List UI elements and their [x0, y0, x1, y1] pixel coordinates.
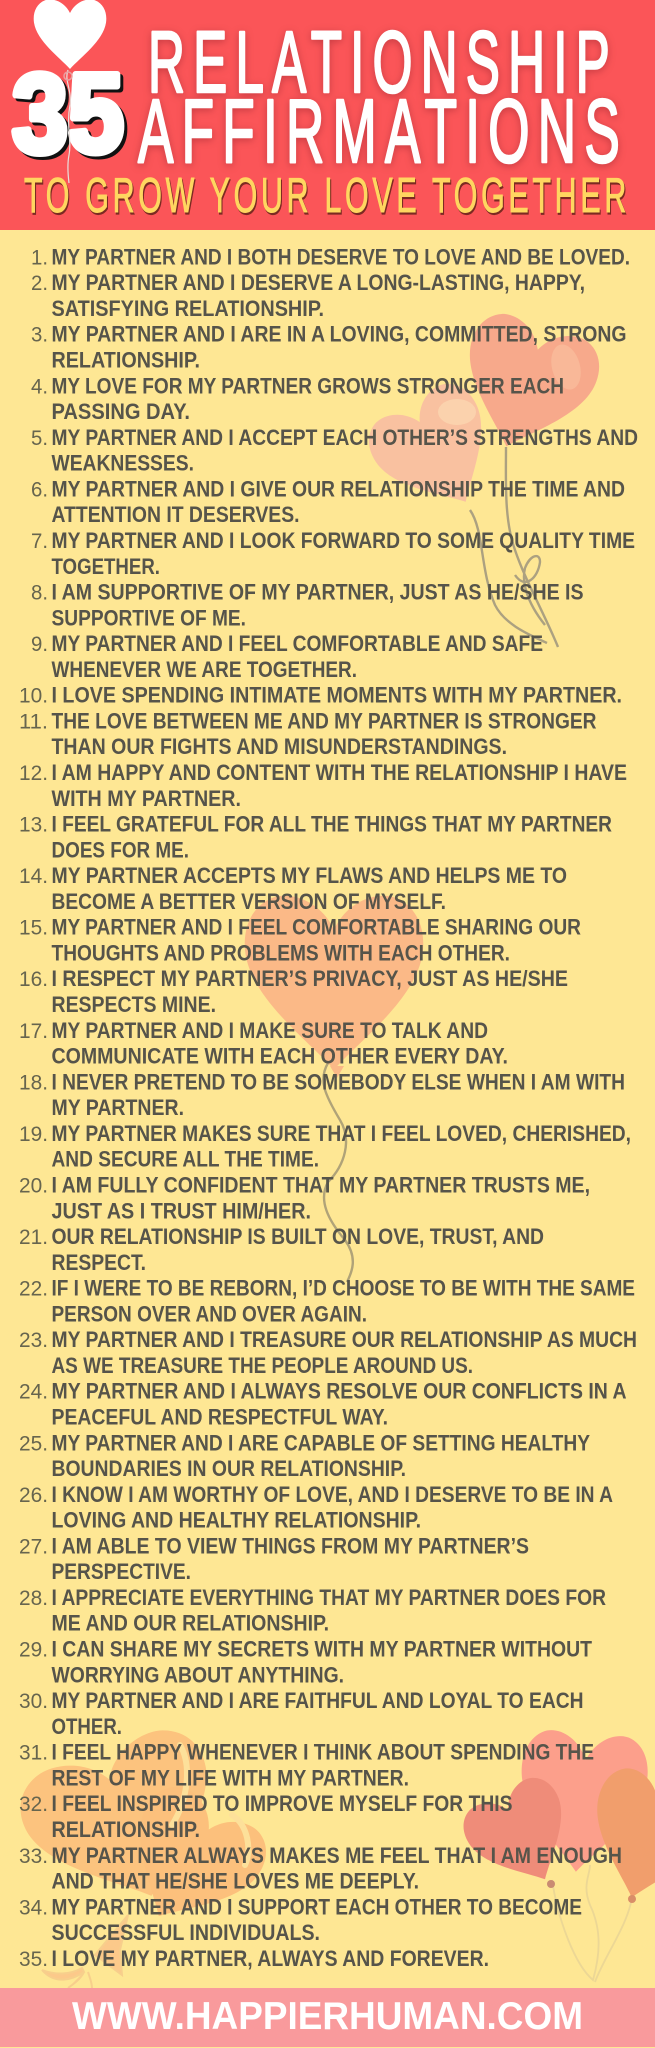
affirmation 32: I FEEL INSPIRED TO IMPROVE MYSELF FOR THIS — [52, 1791, 512, 1816]
affirmation 11: THAN OUR FIGHTS AND MISUNDERSTANDINGS. — [52, 734, 507, 759]
affirmation 14: 14. — [19, 864, 48, 888]
affirmation 21: 21. — [19, 1225, 48, 1249]
affirmation 14: MY PARTNER ACCEPTS MY FLAWS AND HELPS ME TO — [52, 863, 567, 888]
affirmation 28 — [19, 1585, 606, 1636]
affirmation 5: 5. — [31, 426, 48, 450]
affirmation 18: MY PARTNER. — [52, 1095, 184, 1120]
affirmation 15 — [19, 915, 581, 966]
affirmation 16: I RESPECT MY PARTNER’S PRIVACY, JUST AS HE/SHE — [52, 966, 568, 991]
affirmation 3: 3. — [31, 323, 48, 347]
affirmation 5 — [31, 425, 638, 476]
affirmation 19: 19. — [19, 1122, 48, 1146]
affirmation 13 — [19, 812, 612, 862]
affirmation 11: 11. — [19, 709, 48, 733]
affirmation 11 — [19, 708, 596, 759]
affirmation 17: MY PARTNER AND I MAKE SURE TO TALK AND — [52, 1018, 488, 1043]
affirmation 21: OUR RELATIONSHIP IS BUILT ON LOVE, TRUST, AND — [52, 1224, 544, 1249]
affirmation 13: DOES FOR ME. — [52, 837, 189, 862]
affirmation 15: THOUGHTS AND PROBLEMS WITH EACH OTHER. — [52, 940, 510, 966]
footer banner — [0, 1988, 655, 2047]
affirmation 2: 2. — [31, 271, 48, 295]
affirmation 31: REST OF MY LIFE WITH MY PARTNER. — [52, 1765, 409, 1790]
affirmation 13: 13. — [19, 813, 48, 837]
affirmation 7 — [31, 528, 635, 579]
affirmation 20: I AM FULLY CONFIDENT THAT MY PARTNER TRUSTS ME, — [52, 1172, 590, 1198]
affirmation 8 — [31, 580, 584, 630]
affirmation 9: WHENEVER WE ARE TOGETHER. — [52, 657, 357, 682]
affirmation 12: 12. — [19, 761, 48, 785]
affirmation 21: RESPECT. — [52, 1250, 146, 1275]
affirmation 29: WORRYING ABOUT ANYTHING. — [52, 1662, 344, 1687]
balloons: bottom left orange pair — [9, 1718, 278, 1988]
affirmation 6: 6. — [31, 477, 48, 501]
affirmation 8: SUPPORTIVE OF ME. — [52, 605, 246, 630]
affirmation 14 — [19, 863, 567, 914]
affirmation 30: 30. — [19, 1689, 48, 1713]
affirmation 7: TOGETHER. — [52, 554, 160, 579]
footer url: WWW.HAPPIERHUMAN.COM — [72, 1995, 583, 2038]
affirmation 31 — [19, 1740, 594, 1790]
affirmation 15: 15. — [19, 916, 48, 940]
affirmation 25 — [19, 1430, 590, 1481]
icon: white heart balloon — [34, 0, 106, 69]
affirmation 16: 16. — [19, 967, 48, 991]
affirmation 34: 34. — [19, 1895, 48, 1919]
affirmation 29 — [19, 1636, 592, 1687]
affirmation 20: JUST AS I TRUST HIM/HER. — [52, 1198, 311, 1223]
affirmation 9: 9. — [31, 632, 48, 656]
balloons: top right pair — [358, 306, 608, 647]
affirmation 21 — [19, 1224, 544, 1275]
affirmation 7: 7. — [31, 529, 48, 553]
title — [138, 14, 628, 182]
affirmation 23: AS WE TREASURE THE PEOPLE AROUND US. — [52, 1353, 473, 1378]
affirmation 2 — [31, 270, 585, 321]
affirmation 35: 35. — [19, 1947, 48, 1971]
affirmation 27: PERSPECTIVE. — [52, 1559, 191, 1584]
affirmation 4: 4. — [31, 374, 48, 398]
affirmation 20: 20. — [19, 1174, 48, 1198]
affirmation 33: 33. — [19, 1844, 48, 1868]
affirmation 16: RESPECTS MINE. — [52, 992, 216, 1017]
affirmations list — [19, 244, 638, 1971]
affirmation 9: MY PARTNER AND I FEEL COMFORTABLE AND SAFE — [52, 631, 543, 656]
affirmation 18 — [19, 1069, 625, 1120]
affirmation 31: 31. — [19, 1741, 48, 1765]
affirmation 17 — [19, 1018, 508, 1069]
affirmation 12 — [19, 760, 627, 811]
affirmation 14: BECOME A BETTER VERSION OF MYSELF. — [52, 889, 446, 914]
affirmation 20 — [19, 1172, 590, 1223]
affirmation 2: MY PARTNER AND I DESERVE A LONG-LASTING, HAPPY, — [52, 270, 585, 295]
affirmation 23 — [19, 1327, 637, 1378]
affirmation 16 — [19, 966, 568, 1017]
affirmation 12: WITH MY PARTNER. — [52, 786, 241, 811]
affirmation 27: I AM ABLE TO VIEW THINGS FROM MY PARTNER’S — [52, 1533, 529, 1558]
affirmation 27: 27. — [19, 1534, 48, 1558]
affirmation 25: 25. — [19, 1431, 48, 1455]
affirmation 8: 8. — [31, 580, 48, 604]
affirmation 1: 1. — [31, 245, 48, 269]
affirmation 3 — [31, 322, 626, 372]
affirmation 24 — [19, 1379, 626, 1430]
affirmation 28: 28. — [19, 1586, 48, 1610]
affirmation 8: I AM SUPPORTIVE OF MY PARTNER, JUST AS HE/SHE IS — [52, 580, 584, 604]
affirmation 9 — [31, 631, 543, 682]
affirmation 30 — [19, 1688, 584, 1739]
affirmation 32: 32. — [19, 1792, 48, 1816]
number 35: 35 — [15, 54, 127, 179]
number 35: 35 — [12, 51, 124, 176]
affirmation 30: OTHER. — [52, 1714, 122, 1739]
affirmation 26 — [19, 1482, 613, 1533]
affirmation 32: RELATIONSHIP. — [52, 1817, 200, 1842]
affirmation 26: 26. — [19, 1483, 48, 1507]
affirmation 23: 23. — [19, 1328, 48, 1352]
affirmation 34 — [19, 1894, 582, 1945]
affirmation 28: ME AND OUR RELATIONSHIP. — [52, 1611, 329, 1636]
affirmation 10: 10. — [19, 684, 48, 708]
affirmation 33 — [19, 1843, 622, 1894]
affirmation 30: MY PARTNER AND I ARE FAITHFUL AND LOYAL TO EACH — [52, 1688, 584, 1713]
affirmation 4: PASSING DAY. — [52, 399, 190, 424]
affirmation 4 — [31, 373, 564, 424]
header panel — [0, 0, 655, 230]
affirmation 6: ATTENTION IT DESERVES. — [52, 502, 300, 527]
affirmation 19: AND SECURE ALL THE TIME. — [52, 1147, 319, 1172]
affirmation 24: PEACEFUL AND RESPECTFUL WAY. — [52, 1404, 388, 1430]
affirmation 5: WEAKNESSES. — [52, 451, 194, 476]
affirmation 6 — [31, 476, 625, 527]
affirmation 29: 29. — [19, 1638, 48, 1662]
affirmation 32 — [19, 1791, 512, 1842]
affirmation 22: 22. — [19, 1277, 48, 1301]
affirmation 22: PERSON OVER AND OVER AGAIN. — [52, 1301, 367, 1326]
affirmation 3: RELATIONSHIP. — [52, 348, 200, 372]
affirmation 19 — [19, 1121, 631, 1172]
affirmation 25: BOUNDARIES IN OUR RELATIONSHIP. — [52, 1456, 406, 1481]
affirmation 34: SUCCESSFUL INDIVIDUALS. — [52, 1920, 320, 1945]
affirmation 27 — [19, 1533, 529, 1584]
affirmation 35: I LOVE MY PARTNER, ALWAYS AND FOREVER. — [52, 1946, 489, 1971]
affirmation 22 — [19, 1276, 635, 1326]
balloons: bottom right trio — [455, 1728, 655, 1982]
affirmation 24: 24. — [19, 1380, 48, 1404]
affirmation 4: MY LOVE FOR MY PARTNER GROWS STRONGER EACH — [52, 373, 564, 398]
affirmation 17: COMMUNICATE WITH EACH OTHER EVERY DAY. — [52, 1044, 508, 1069]
affirmation 33: AND THAT HE/SHE LOVES ME DEEPLY. — [52, 1868, 419, 1894]
affirmation 26: LOVING AND HEALTHY RELATIONSHIP. — [52, 1508, 421, 1533]
affirmation 18: 18. — [19, 1070, 48, 1094]
affirmation 2: SATISFYING RELATIONSHIP. — [52, 296, 324, 321]
affirmation 17: 17. — [19, 1019, 48, 1043]
balloon: middle orange heart — [245, 896, 423, 1282]
